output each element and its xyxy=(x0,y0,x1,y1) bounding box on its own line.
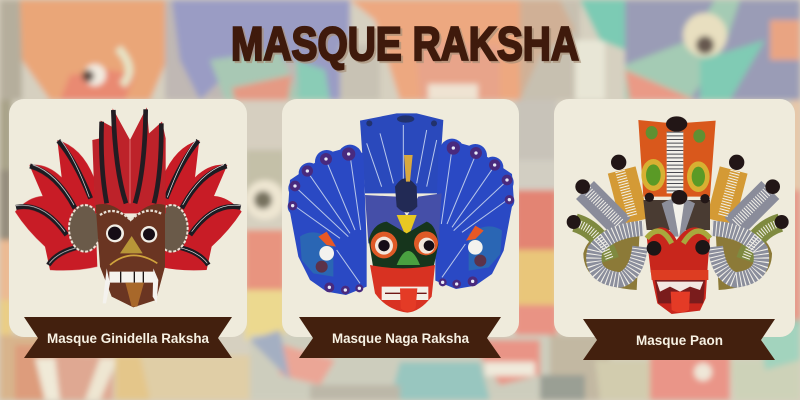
panel: card Naga xyxy=(282,99,519,337)
gap 1 xyxy=(245,100,285,150)
label ribbon: Naga: Masque Naga Raksha xyxy=(332,331,469,346)
gap 2 xyxy=(515,100,557,160)
icon: Paon mask xyxy=(567,116,789,314)
icon: Naga mask xyxy=(288,113,514,313)
label ribbon: Ginidella xyxy=(24,317,232,358)
icon: Ginidella mask xyxy=(15,107,242,307)
left xyxy=(0,100,12,170)
label ribbon: Paon xyxy=(583,319,775,360)
bottom xyxy=(0,335,80,400)
panel: card Paon xyxy=(554,99,795,337)
title: MASQUE RAKSHA xyxy=(233,19,581,72)
label ribbon: Naga xyxy=(299,317,501,358)
panel: card Ginidella xyxy=(9,99,247,337)
label ribbon: Paon: Masque Paon xyxy=(636,333,723,348)
label ribbon: Ginidella: Masque Ginidella Raksha xyxy=(47,331,209,346)
title: MASQUE RAKSHA xyxy=(231,17,579,70)
